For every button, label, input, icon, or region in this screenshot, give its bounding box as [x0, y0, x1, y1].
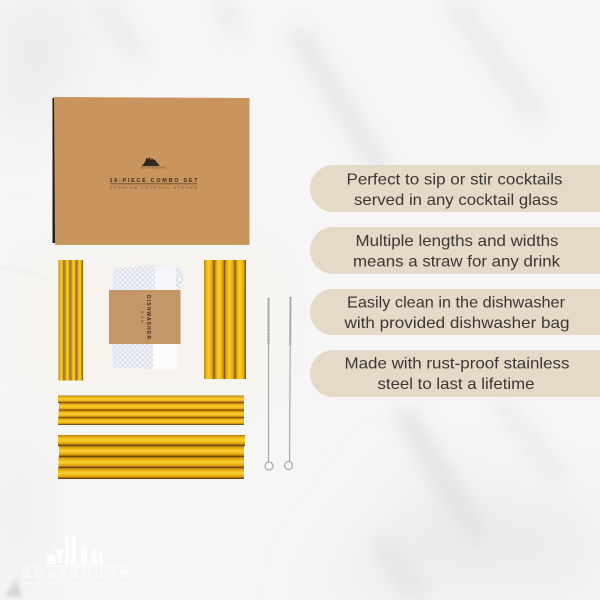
brush right [284, 297, 292, 470]
thin vertical straws [58, 260, 83, 380]
kraft sleeve [109, 290, 180, 344]
box logo [140, 157, 167, 170]
callout pill 3 [310, 289, 600, 335]
thin horizontal straws [58, 396, 244, 425]
callout pill 4: steel to last a lifetime [378, 376, 535, 393]
logo wordmark: abarabove [22, 565, 128, 582]
cleaning brushes [265, 297, 292, 470]
callout pill 3: with provided dishwasher bag [343, 315, 570, 332]
dishwasher bag: BAG [140, 311, 145, 323]
callout pill 2 [310, 227, 600, 274]
box logo: abarabove [140, 166, 167, 170]
callout pill 1: Perfect to sip or stir cocktails [346, 172, 562, 188]
brush left [265, 298, 273, 470]
callout pill 4: Made with rust-proof stainless [344, 356, 570, 372]
wide vertical straws [204, 260, 246, 379]
product box [52, 97, 250, 245]
dishwasher bag [109, 265, 183, 369]
callout pill 3: Easily clean in the dishwasher [347, 294, 566, 312]
callout pill 1: served in any cocktail glass [354, 192, 558, 209]
callout pill 2: Multiple lengths and widths [356, 233, 558, 250]
sleeve text: DISHWASHER [145, 295, 151, 339]
mesh bag [112, 265, 183, 369]
box subtitle: PREMIUM COCKTAIL STRAWS [110, 185, 197, 190]
wide horizontal straws [58, 435, 245, 479]
callout pill 2: means a straw for any drink [353, 254, 561, 270]
callout pill 1 [310, 165, 600, 212]
logo: a bar above [22, 536, 128, 583]
box title: 16-PIECE COMBO SET [110, 178, 198, 184]
logo bottle icons [47, 536, 103, 564]
callout pill 4 [310, 350, 600, 397]
